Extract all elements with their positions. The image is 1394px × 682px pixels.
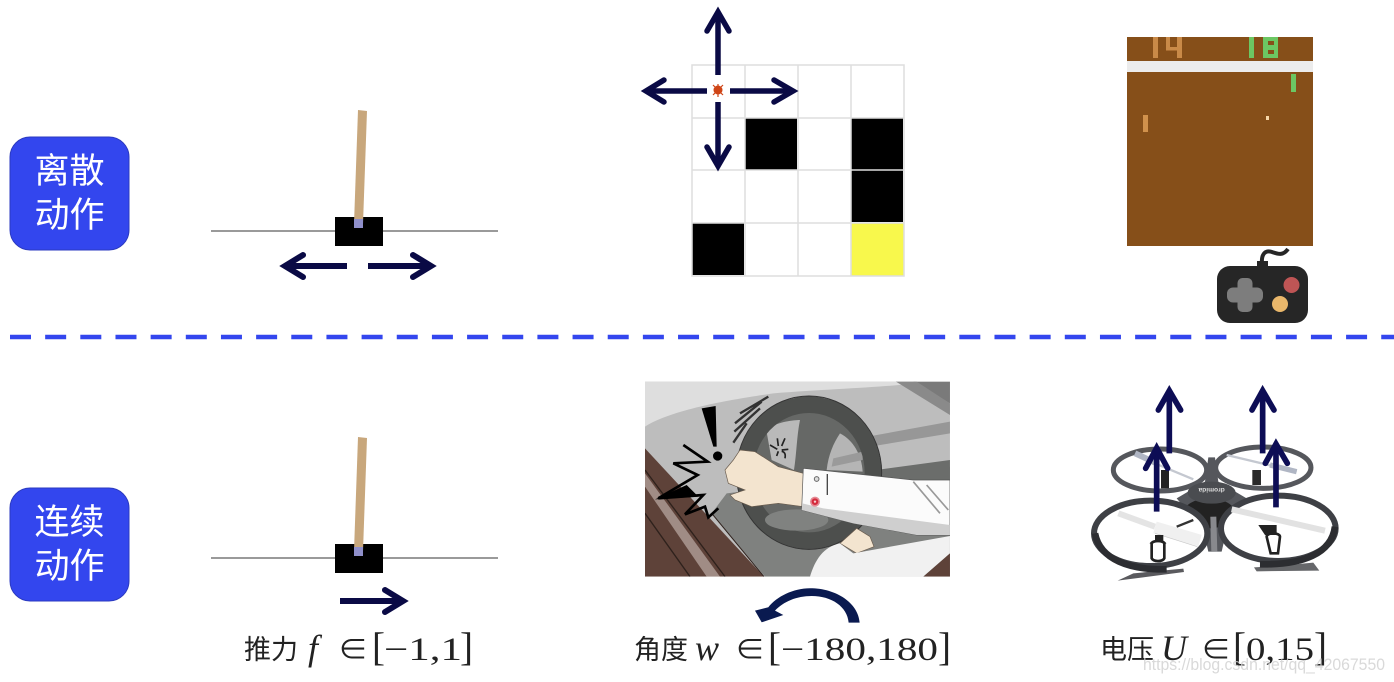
label: continuous actions [10, 488, 129, 601]
icon: agent [713, 84, 723, 97]
formula: angle: [ [768, 624, 781, 669]
arrows: rotor thrust [1146, 391, 1287, 512]
hub [1188, 482, 1236, 504]
formula: angle: ] [938, 624, 951, 669]
panel: cart-pole with discrete actions [211, 110, 498, 246]
hand [725, 450, 803, 507]
formula: voltage: ∈ [1201, 634, 1231, 667]
brown door edge [645, 448, 764, 577]
formula: force: ] [460, 624, 473, 669]
formula: angle: w [695, 628, 719, 668]
icon: exclamation [702, 406, 722, 461]
label: discrete actions [10, 137, 129, 250]
small hand [840, 528, 874, 553]
formula: angle: ∈ [735, 634, 765, 667]
label: discrete actions: 动作 [34, 196, 105, 235]
panel: grid world [692, 65, 904, 276]
formula: force: f [308, 628, 323, 668]
label: continuous actions: 连续 [34, 503, 105, 542]
arrow: continuous push [340, 590, 403, 612]
formula: force [308, 624, 473, 669]
steering wheel [736, 396, 882, 549]
score: right player [1249, 37, 1278, 58]
panel: pong game [1127, 37, 1313, 246]
panel: quadcopter drone: dromida [1198, 486, 1225, 493]
formula: voltage: ] [1314, 624, 1327, 669]
label: continuous actions: 动作 [34, 547, 105, 586]
label: voltage range: 电压 [1100, 635, 1154, 665]
label: angle range: 角度 [634, 635, 688, 665]
back rings [1113, 449, 1207, 491]
lower arm [810, 536, 950, 577]
label: force range: 推力 [244, 635, 298, 665]
divider: dashed line [10, 335, 1394, 339]
arrow: push left [285, 255, 347, 277]
frame [1177, 457, 1247, 552]
panel: quadcopter drone [1094, 391, 1336, 581]
icon: anger mark [770, 438, 788, 458]
arrows: four grid moves [646, 12, 793, 166]
panel: cart-pole with continuous action [211, 437, 498, 573]
formula: voltage: U [1161, 628, 1189, 668]
arrow: rotate wheel [755, 588, 860, 623]
label: discrete actions: 离散 [34, 152, 105, 191]
formula: force: −1,1 [384, 632, 462, 668]
stands [1118, 569, 1184, 581]
icon: impact burst [655, 445, 718, 517]
icon: motion lines [733, 397, 768, 443]
panel: steering wheel illustration [645, 380, 950, 577]
formula: voltage: 0,15 [1246, 632, 1314, 668]
formula: voltage: [ [1233, 624, 1246, 669]
score: left player [1153, 37, 1182, 58]
sleeve [802, 468, 950, 535]
front rings [1094, 501, 1207, 566]
icon: game controller [1217, 249, 1308, 323]
blades [1118, 513, 1155, 527]
formula: force: ∈ [338, 634, 368, 667]
formula: angle: −180,180 [781, 632, 938, 668]
arrow: push right [368, 255, 431, 277]
motors [1151, 541, 1165, 561]
lower dashboard [714, 492, 950, 576]
formula: voltage [1161, 624, 1327, 669]
formula: angle [695, 624, 951, 669]
formula: force: [ [372, 624, 385, 669]
